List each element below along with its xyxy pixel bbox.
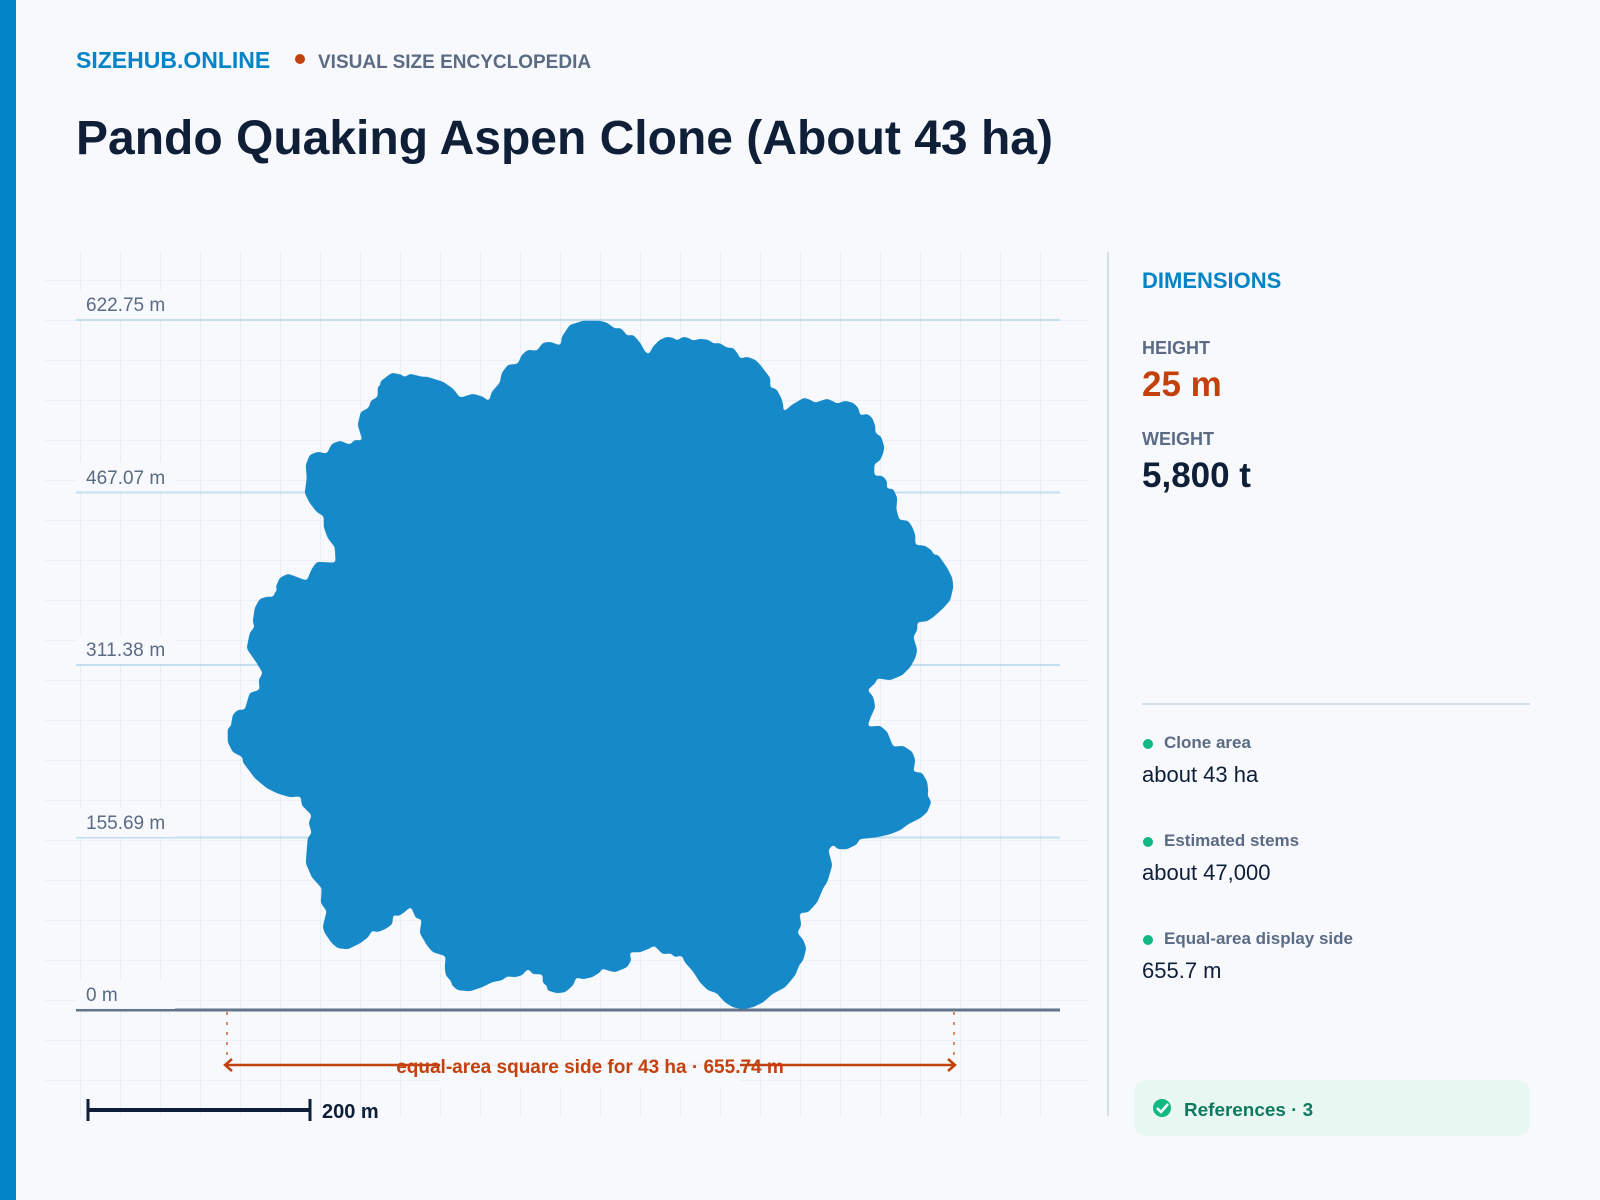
height labels: 155.69 m xyxy=(86,813,165,834)
equal-area width dimension: equal-area square side for 43 ha · 655.74 m xyxy=(396,1057,784,1078)
clone footprint silhouette xyxy=(228,321,953,1009)
title: Pando Quaking Aspen Clone (About 43 ha) xyxy=(76,112,1053,165)
panel: clone facts: about 43 ha xyxy=(1142,762,1259,787)
ground line xyxy=(76,1008,1060,1012)
equal-area width dimension xyxy=(225,1012,955,1087)
header brand row xyxy=(76,47,591,73)
height labels xyxy=(76,290,175,1009)
references badge xyxy=(1134,1080,1530,1136)
scale bar: 200 m xyxy=(322,1101,379,1123)
height labels: 0 m xyxy=(86,985,118,1006)
accent bar xyxy=(0,0,16,1200)
panel: dimensions: 5,800 t xyxy=(1142,456,1251,495)
panel: clone facts: about 47,000 xyxy=(1142,860,1270,885)
scale bar xyxy=(88,1099,379,1123)
panel: dimensions xyxy=(1142,268,1281,495)
panel: size chart xyxy=(44,252,1088,1123)
header brand row: SIZEHUB.ONLINE xyxy=(76,47,270,73)
panel: clone facts xyxy=(1142,733,1353,983)
height labels: 311.38 m xyxy=(86,640,165,661)
header brand row: VISUAL SIZE ENCYCLOPEDIA xyxy=(318,52,591,73)
height labels: 467.07 m xyxy=(86,468,165,489)
panel: clone facts: Clone area xyxy=(1164,733,1251,752)
sidebar divider xyxy=(1107,252,1109,1116)
panel: clone facts: 655.7 m xyxy=(1142,958,1222,983)
panel: clone facts: Estimated stems xyxy=(1164,831,1299,850)
panel: dimensions: HEIGHT xyxy=(1142,338,1210,358)
panel: dimensions: DIMENSIONS xyxy=(1142,268,1281,293)
references badge: References · 3 xyxy=(1184,1100,1313,1121)
height labels: 622.75 m xyxy=(86,295,165,316)
panel: dimensions: WEIGHT xyxy=(1142,429,1214,449)
panel: dimensions: 25 m xyxy=(1142,365,1222,404)
panel: clone facts: Equal-area display side xyxy=(1164,929,1353,948)
